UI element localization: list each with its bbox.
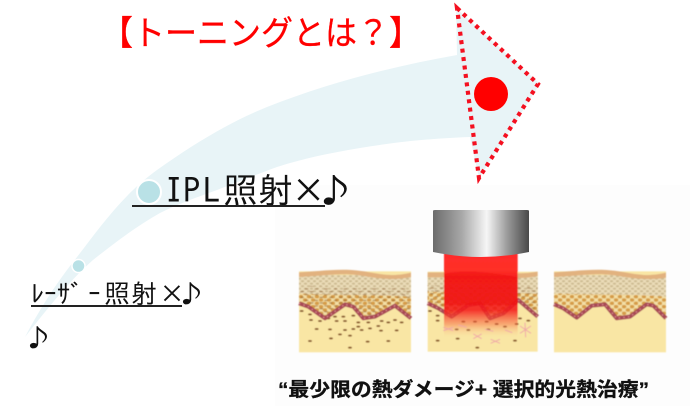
music note: ♪ [25, 325, 51, 351]
curved light-blue arrow [25, 8, 540, 337]
caption: “最少限の熱ダメージ+ 選択的光熱治療” [278, 378, 649, 401]
IPL label: IPL照射×♪ [165, 173, 352, 208]
dotted red triangle [457, 8, 538, 178]
background panel behind skin illustration [275, 185, 690, 406]
laser label: ﾚｰｻﾞｰ照射×♪ [31, 281, 204, 307]
skin panel: during treatment [428, 250, 538, 352]
title: 【トーニングとは？】 [101, 15, 421, 53]
red circle [474, 77, 508, 111]
laser sparks [443, 323, 531, 343]
IPL marker circle [137, 180, 161, 204]
skin panel: before [299, 270, 411, 352]
laser device head [433, 210, 529, 257]
skin panel: after [554, 270, 666, 352]
laser marker circle [72, 260, 85, 272]
laser beam [444, 250, 518, 338]
